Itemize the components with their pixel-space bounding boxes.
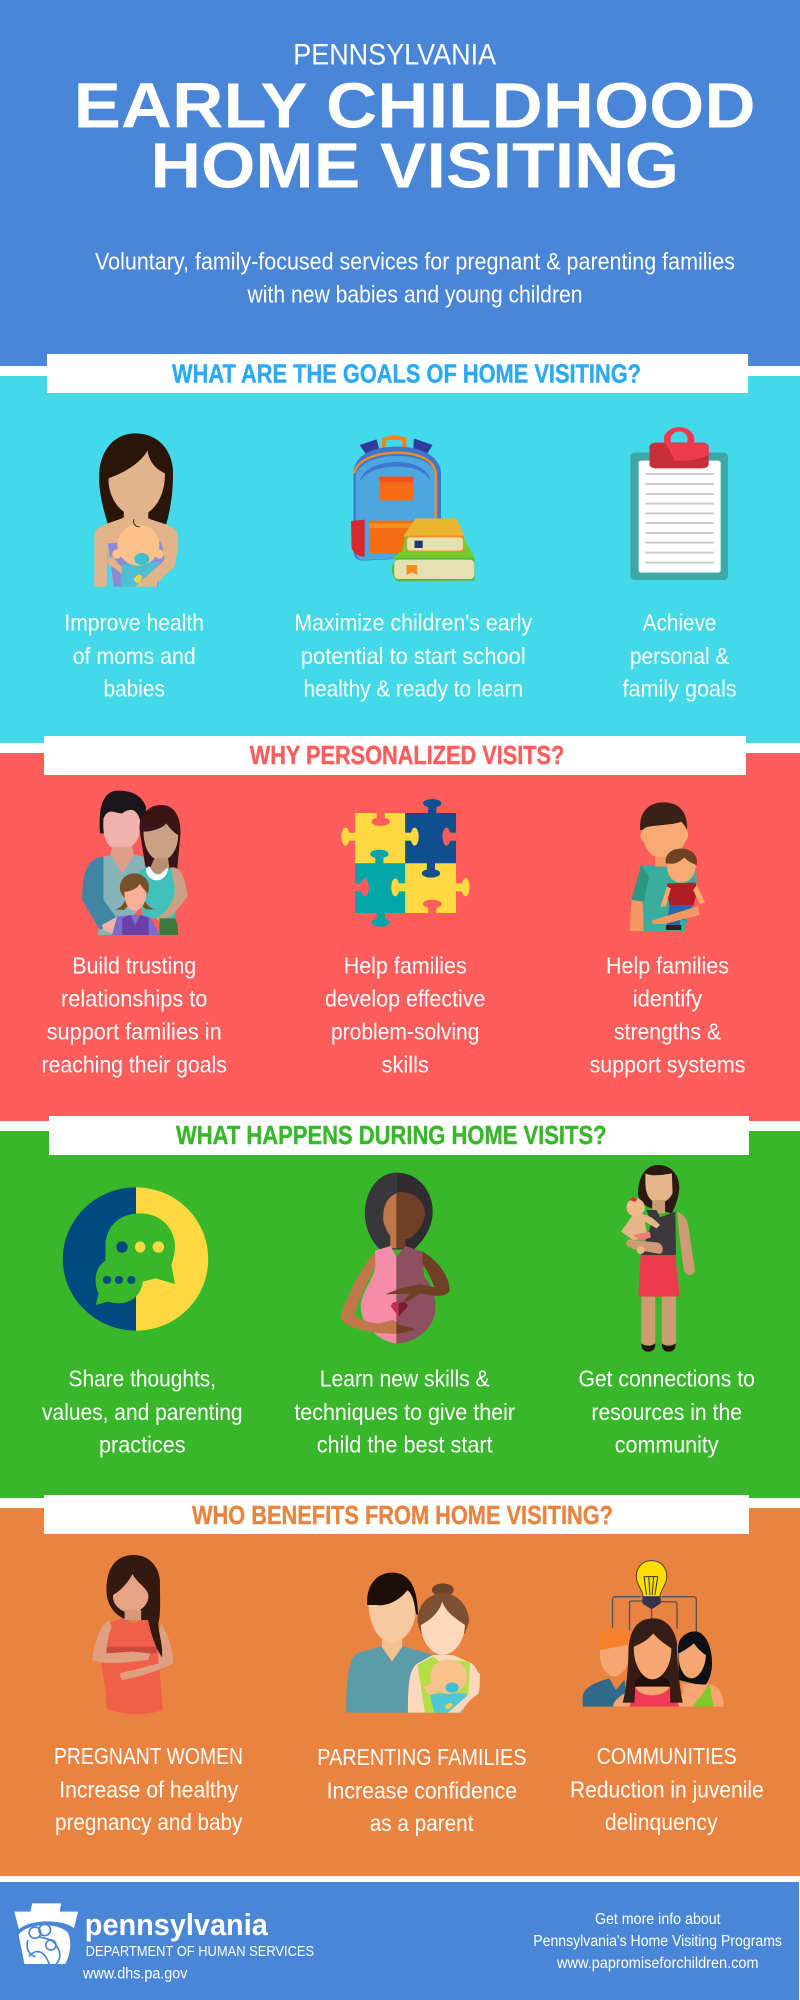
more info text: Pennsylvania's Home Visiting Programs	[533, 1933, 782, 1950]
icon: father holding son	[630, 802, 705, 931]
heading: personalized	[44, 736, 746, 775]
icon: family of three	[82, 791, 187, 935]
icon: community under light bulb	[583, 1561, 723, 1707]
text: strengths and support: Help families	[606, 952, 729, 978]
text: learn new skills: child the best start	[317, 1432, 493, 1458]
title: HOME VISITING	[150, 130, 679, 202]
icon: mother holding baby	[94, 433, 178, 587]
heading: goals	[47, 354, 748, 393]
text: communities: Reduction in juvenile	[570, 1776, 764, 1802]
text: learn new skills: techniques to give their	[294, 1399, 515, 1425]
icon: pregnant woman, half shaded	[340, 1173, 450, 1343]
text: connections to resources: resources in the	[591, 1399, 742, 1425]
text: strengths and support	[590, 952, 745, 1078]
text: strengths and support: identify	[633, 986, 703, 1012]
text: pregnant women: Increase of healthy	[59, 1776, 239, 1802]
panel: what happens during home visits	[0, 1116, 800, 1498]
title: EARLY CHILDHOOD	[74, 70, 756, 142]
text: learn new skills	[294, 1366, 515, 1458]
text: pregnant women: PREGNANT WOMEN	[54, 1743, 243, 1769]
website: dhs: www.dhs.pa.gov	[82, 1966, 188, 1983]
heading: what happens: WHAT HAPPENS DURING HOME VISITS?	[176, 1120, 607, 1150]
heading: personalized: WHY PERSONALIZED VISITS?	[250, 740, 564, 770]
heading: who benefits: WHO BENEFITS FROM HOME VISITING?	[192, 1500, 613, 1530]
text: share thoughts: values, and parenting	[42, 1399, 243, 1425]
text: problem solving: problem-solving	[331, 1018, 479, 1044]
text: parenting families: PARENTING FAMILIES	[317, 1744, 526, 1770]
panel: who benefits	[0, 1495, 800, 1876]
icon: backpack and books	[351, 438, 475, 581]
text: pregnant women	[54, 1743, 243, 1835]
more info text: Get more info about	[595, 1911, 721, 1928]
more info text	[533, 1911, 782, 1972]
panel: goals of home visiting	[0, 354, 800, 743]
logo wordmark: DEPARTMENT OF HUMAN SERVICES	[86, 1944, 314, 1960]
text: maximize potential	[294, 610, 533, 702]
text: connections to resources: community	[615, 1432, 719, 1458]
text: communities: delinquency	[605, 1809, 718, 1835]
kicker: Pennsylvania: PENNSYLVANIA	[293, 38, 496, 72]
text: pregnant women: pregnancy and baby	[55, 1809, 243, 1835]
text: trusting relationships: Build trusting	[72, 952, 196, 978]
icon: pregnant woman in red dress	[92, 1555, 173, 1714]
header panel	[0, 0, 800, 366]
text: trusting relationships: relationships to	[61, 986, 207, 1012]
text: achieve goals: family goals	[622, 676, 737, 702]
text: parenting families: Increase confidence	[327, 1777, 517, 1803]
more info text: www.papromiseforchildren.com	[556, 1955, 759, 1972]
text: maximize potential: healthy & ready to learn	[304, 676, 523, 702]
text: share thoughts: Share thoughts,	[69, 1366, 216, 1392]
title	[74, 70, 756, 202]
text: improve health: of moms and	[73, 643, 196, 669]
text: parenting families: as a parent	[370, 1810, 474, 1836]
text: maximize potential: Maximize children's early	[294, 610, 533, 636]
icon: woman holding baby	[621, 1165, 695, 1352]
text: problem solving: Help families	[344, 952, 467, 978]
text: trusting relationships: reaching their goals	[42, 1052, 227, 1078]
text: parenting families	[317, 1744, 526, 1836]
text: communities: COMMUNITIES	[597, 1743, 737, 1769]
text: connections to resources	[578, 1366, 755, 1458]
text: share thoughts	[42, 1366, 243, 1458]
icon: speech bubbles circle	[63, 1187, 208, 1331]
text: improve health	[64, 610, 204, 702]
icon: puzzle pieces	[341, 799, 470, 927]
text: strengths and support: support systems	[590, 1052, 745, 1078]
text: trusting relationships	[42, 952, 227, 1078]
text: maximize potential: potential to start school	[301, 643, 526, 669]
heading: goals: WHAT ARE THE GOALS OF HOME VISITING?	[172, 358, 641, 388]
subtitle	[95, 248, 735, 309]
text: learn new skills: Learn new skills &	[320, 1366, 490, 1392]
text: improve health: babies	[104, 676, 165, 702]
icon: clipboard	[630, 429, 728, 580]
text: achieve goals	[622, 610, 737, 702]
text: problem solving	[325, 952, 485, 1078]
footer panel	[0, 1882, 799, 2000]
subtitle: with new babies and young children	[247, 282, 582, 309]
heading: what happens	[49, 1116, 749, 1155]
text: problem solving: skills	[382, 1052, 429, 1078]
text: share thoughts: practices	[99, 1432, 186, 1458]
text: connections to resources: Get connections to	[578, 1366, 755, 1392]
logo: keystone with family	[14, 1903, 78, 1964]
text: communities	[570, 1743, 764, 1835]
text: achieve goals: Achieve	[643, 610, 716, 636]
heading: who benefits	[44, 1495, 749, 1534]
subtitle: Voluntary, family-focused services for pregnant & parenting families	[95, 248, 735, 276]
text: trusting relationships: support families in	[47, 1018, 222, 1044]
text: problem solving: develop effective	[325, 986, 485, 1012]
icon: parents with baby	[346, 1573, 480, 1713]
text: improve health: Improve health	[64, 610, 204, 636]
text: achieve goals: personal &	[630, 643, 729, 669]
text: strengths and support: strengths &	[614, 1018, 721, 1044]
panel: why personalized visits	[0, 736, 800, 1121]
logo wordmark: pennsylvania	[85, 1907, 269, 1942]
logo wordmark	[85, 1907, 314, 1960]
